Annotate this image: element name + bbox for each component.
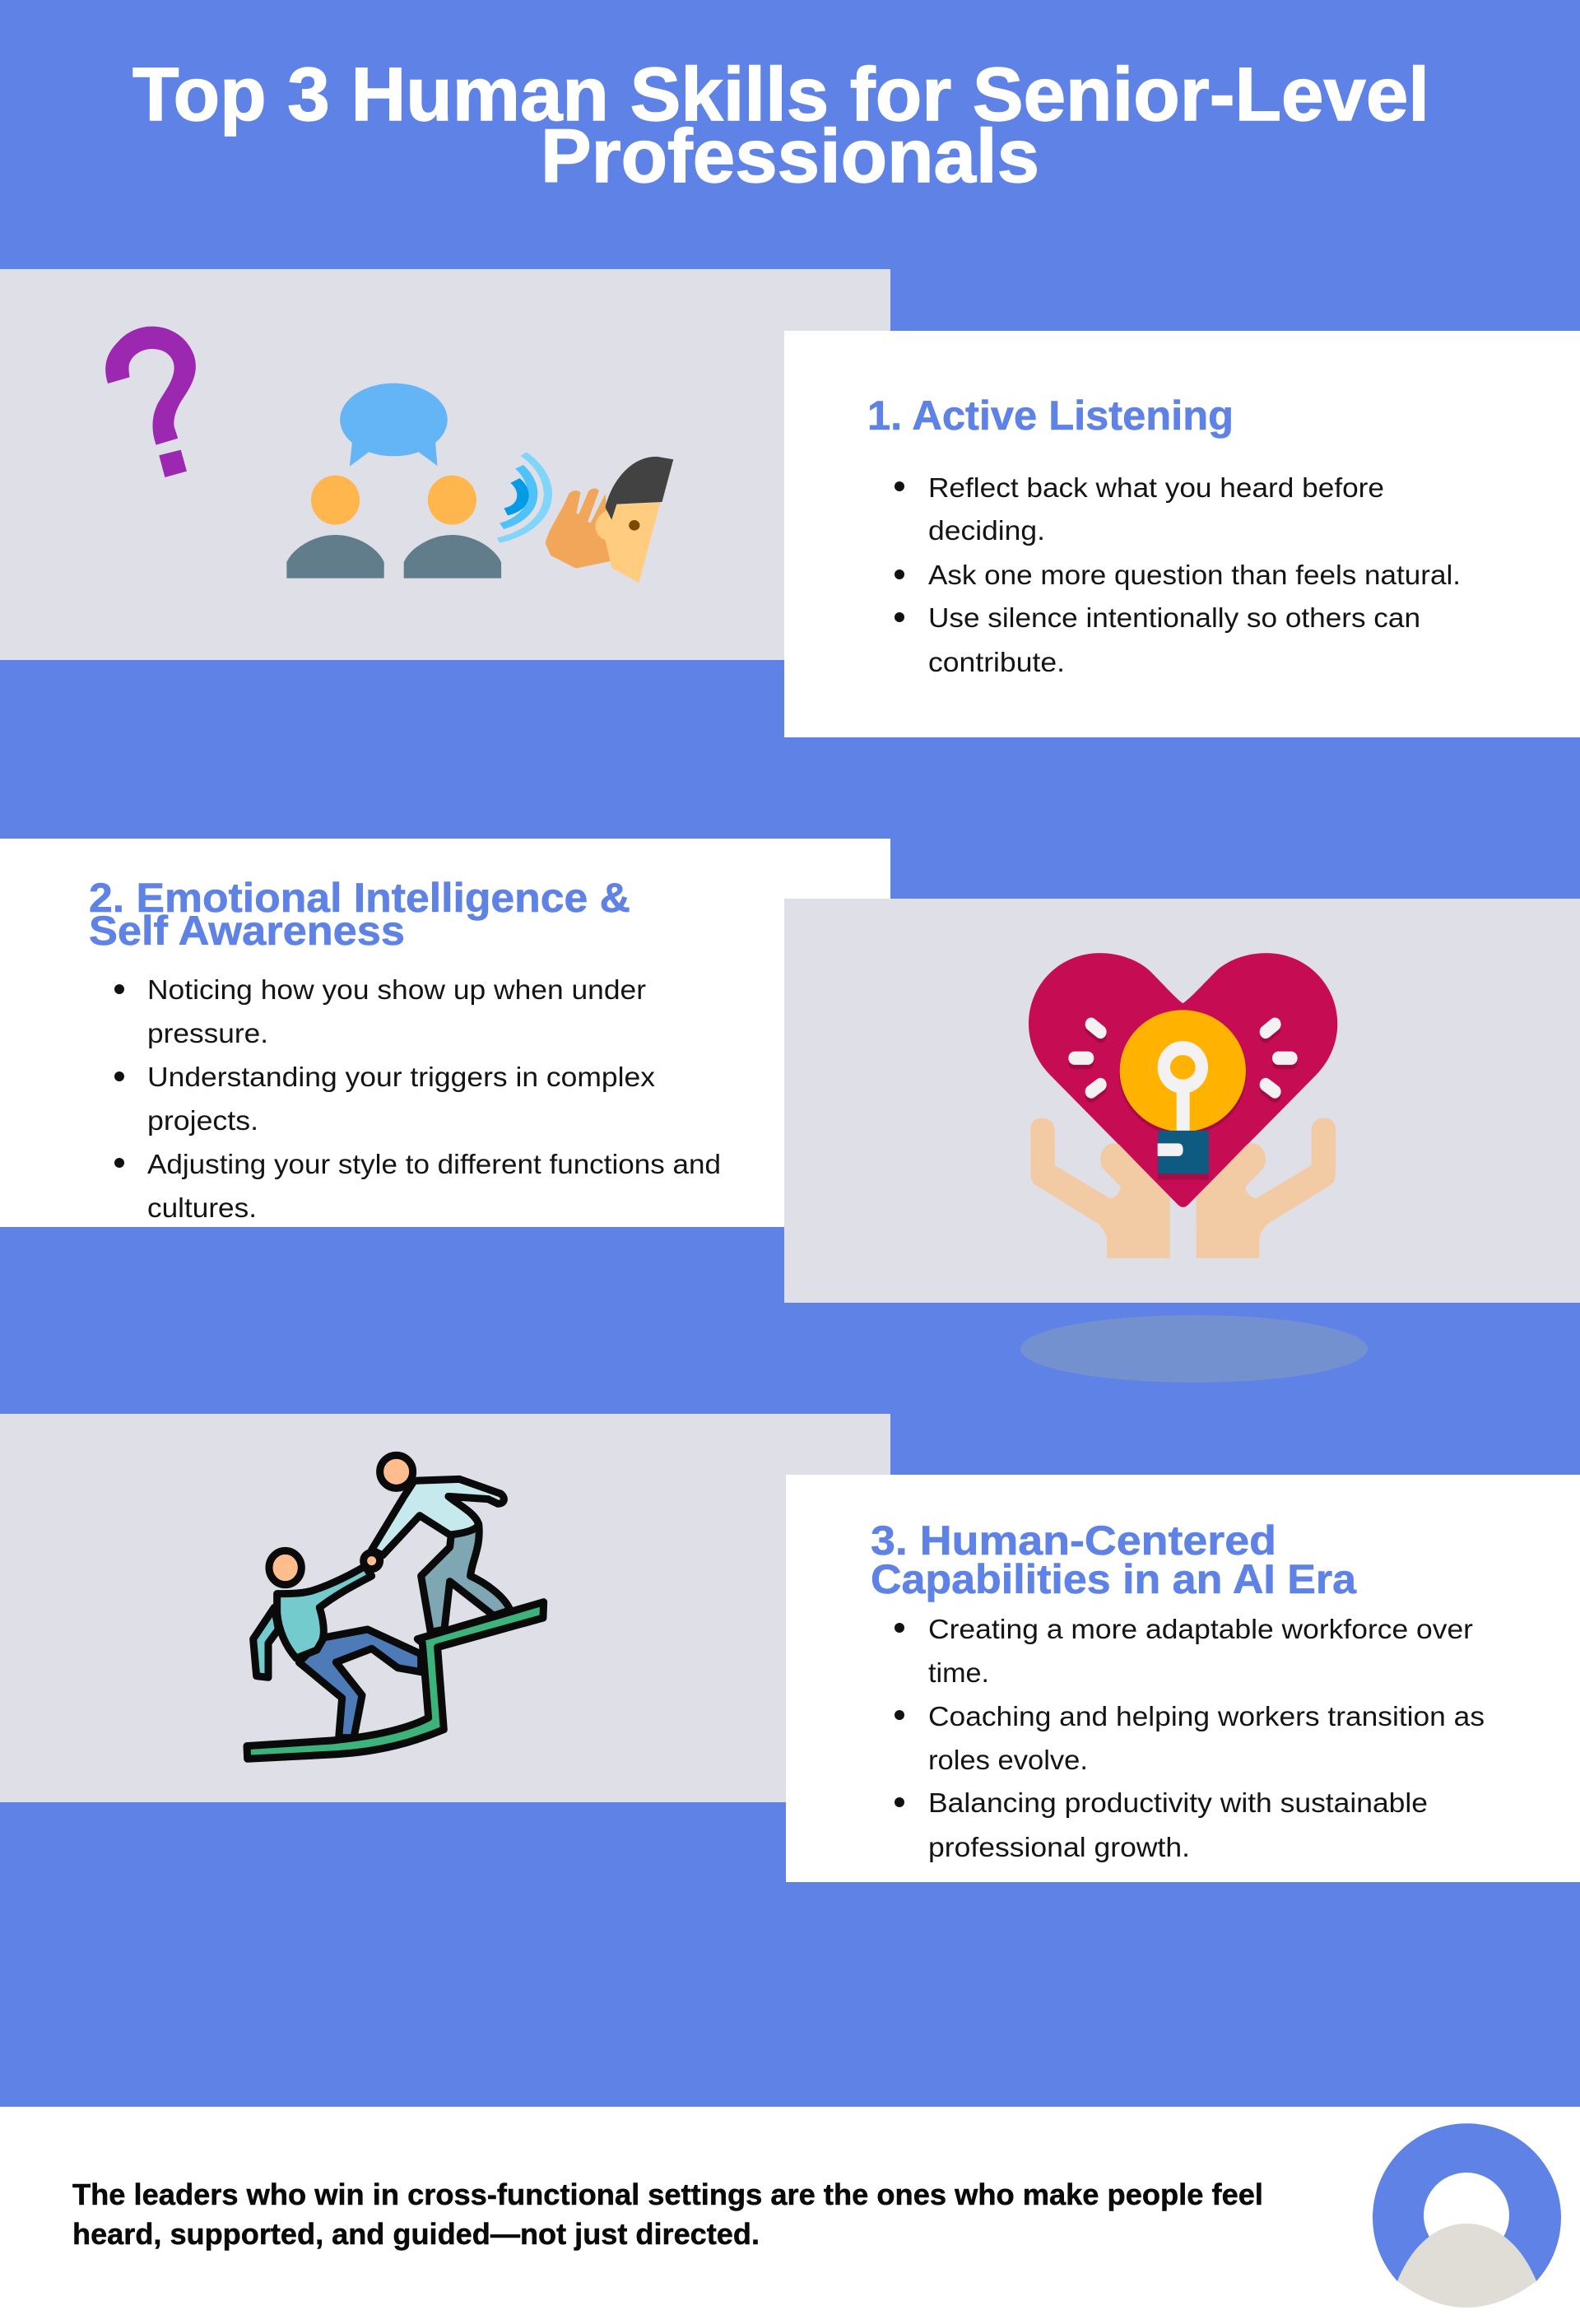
panel: 1. active listening: [784, 331, 1580, 737]
icon: green steps: [247, 1602, 544, 1759]
heading: human-centered capabilities: Capabilities in an AI Era: [871, 1556, 1357, 1602]
icon: user avatar: [1373, 2123, 1561, 2308]
bullet list: human-centered capabilities: time.: [928, 1657, 989, 1688]
icon: lightbulb: [1119, 1010, 1247, 1180]
panel: 3. human-centered capabilities: [786, 1475, 1580, 1882]
icon: question mark: [105, 327, 196, 477]
title: Top 3 Human Skills for Senior-Level: [132, 53, 1429, 137]
bullet list: active listening: contribute.: [928, 647, 1065, 677]
icon: speech bubble: [340, 383, 448, 467]
heading: active listening: 1. Active Listening: [867, 393, 1234, 439]
icon: light rays: [1075, 1025, 1291, 1096]
bullet list: active listening: [895, 472, 1461, 677]
title: Professionals: [541, 114, 1039, 198]
panel: 2. emotional intelligence and self awareness: [0, 839, 890, 1227]
bullet list: human-centered capabilities: Coaching and helping workers transition as: [928, 1701, 1485, 1731]
bullet list: active listening: deciding.: [928, 515, 1045, 546]
icon: sound waves: [499, 454, 548, 541]
bullet list: active listening: Ask one more question than feels natural.: [928, 560, 1461, 590]
icon: upper climber: [372, 1455, 510, 1632]
bullet list: human-centered capabilities: [895, 1614, 1485, 1862]
heading: emotional intelligence: [89, 875, 630, 954]
icon: two people: [286, 476, 501, 579]
panel: active listening illustration: [0, 269, 890, 660]
footer text: heard, supported, and guided—not just directed.: [72, 2217, 760, 2251]
bullet list: active listening: Reflect back what you heard before: [928, 472, 1384, 503]
icon: listening face with cupped hand: [546, 457, 673, 583]
heading: emotional intelligence: Self Awareness: [89, 908, 405, 954]
icon: listening people and question mark: [105, 327, 673, 583]
shadow ellipse: [1020, 1315, 1368, 1383]
panel: human-centered capabilities illustration: [0, 1414, 890, 1802]
heading: human-centered capabilities: [871, 1518, 1357, 1602]
bullet list: emotional intelligence: Understanding your triggers in complex: [147, 1062, 656, 1092]
icon: person helping another climb steps: [247, 1455, 544, 1759]
footer text: [72, 2178, 1263, 2251]
bullet list: active listening: Use silence intentionally so others can: [928, 602, 1420, 633]
panel: emotional intelligence illustration: [784, 899, 1580, 1303]
icon: heart: [1029, 953, 1337, 1207]
bullet list: human-centered capabilities: Creating a more adaptable workforce over: [928, 1614, 1473, 1644]
bullet list: human-centered capabilities: roles evolve.: [928, 1745, 1088, 1775]
bullet list: human-centered capabilities: Balancing productivity with sustainable: [928, 1787, 1428, 1818]
bullet list: emotional intelligence: [114, 974, 721, 1223]
icon: heart with lightbulb and hands: [1029, 953, 1337, 1258]
bullet list: emotional intelligence: pressure.: [147, 1018, 268, 1048]
bullet list: emotional intelligence: Adjusting your style to different functions and: [147, 1149, 721, 1179]
heading: human-centered capabilities: 3. Human-Centered: [871, 1518, 1276, 1564]
bullet list: emotional intelligence: projects.: [147, 1105, 258, 1136]
icon: lower climber: [253, 1550, 421, 1738]
footer text: The leaders who win in cross-functional settings are the ones who make people feel: [72, 2178, 1263, 2211]
bullet list: emotional intelligence: Noticing how you show up when under: [147, 974, 646, 1005]
title: [132, 53, 1429, 198]
bullet list: emotional intelligence: cultures.: [147, 1192, 257, 1223]
icon: cupped hands: [1030, 1118, 1336, 1258]
heading: emotional intelligence: 2. Emotional Intelligence &: [89, 875, 630, 921]
footer panel: [0, 2107, 1580, 2324]
bullet list: human-centered capabilities: professional growth.: [928, 1832, 1190, 1862]
